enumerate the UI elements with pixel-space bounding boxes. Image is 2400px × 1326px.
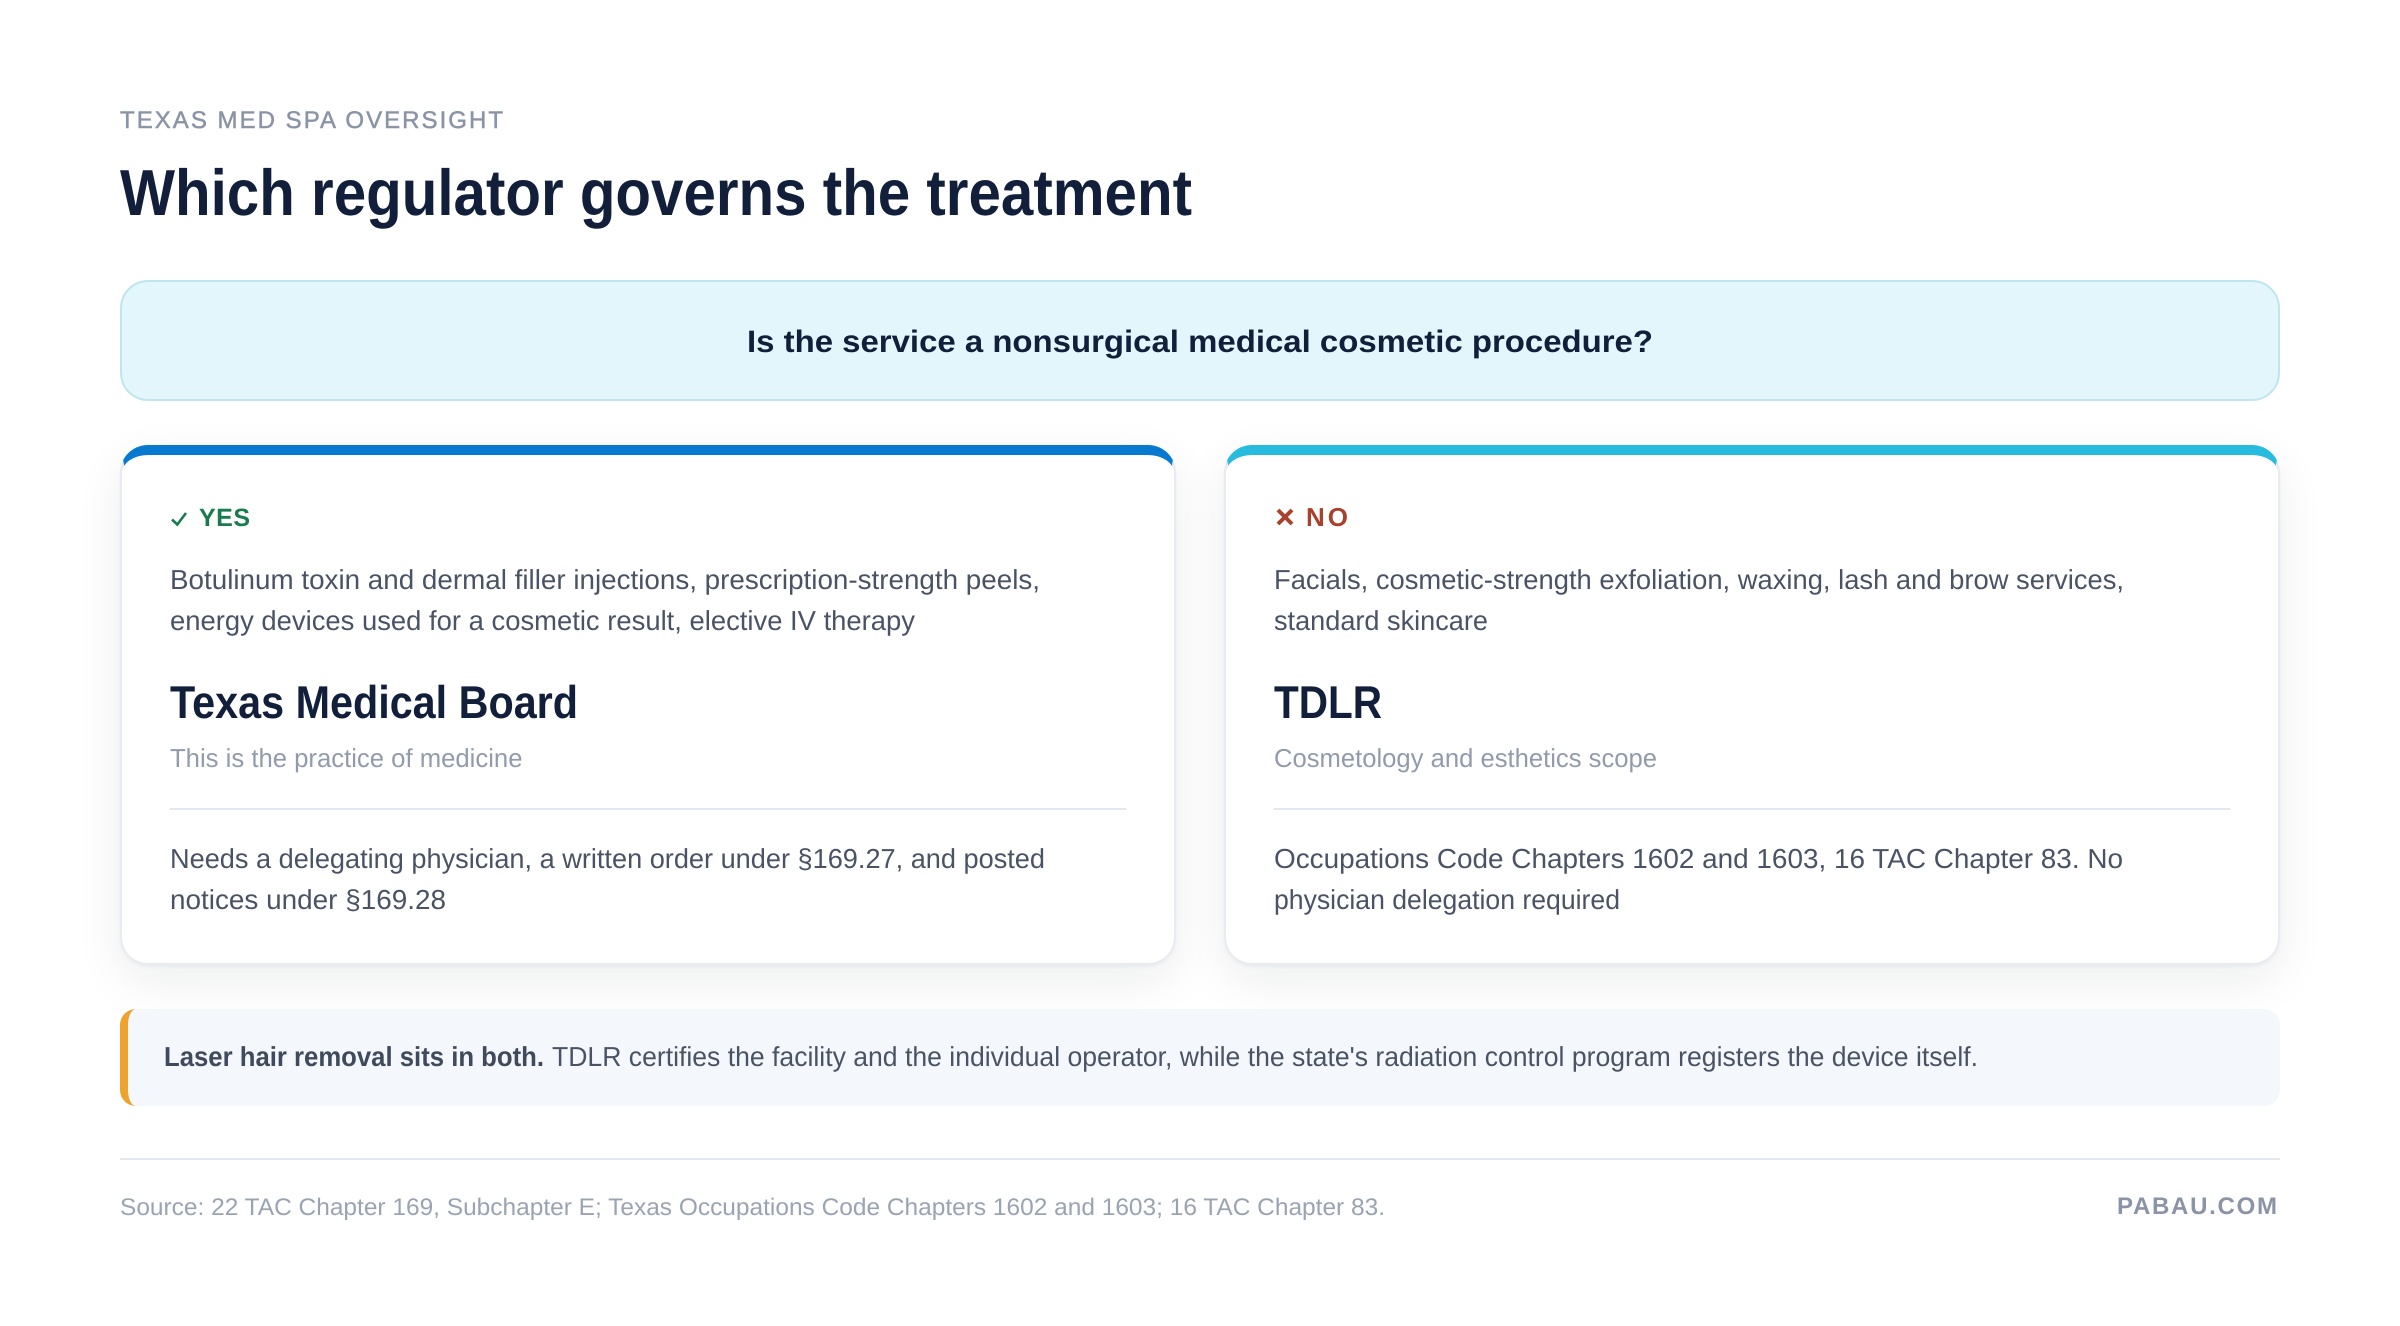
- yes services text: [170, 564, 1040, 636]
- panel: no card: [1224, 445, 2280, 965]
- yes requirements text: [170, 843, 1045, 915]
- no requirements text: [1274, 843, 2123, 915]
- eyebrow: TEXAS MED SPA OVERSIGHT: [120, 107, 503, 134]
- yes requirements text: notices under §169.28: [170, 884, 446, 915]
- no requirements text: physician delegation required: [1274, 884, 1620, 915]
- yes label: YES: [199, 504, 250, 532]
- panel: question banner: [120, 280, 2280, 401]
- source note: Source: 22 TAC Chapter 169, Subchapter E; Texas Occupations Code Chapters 1602 and 1603; 16 TAC Chapter 83.: [120, 1194, 1385, 1221]
- regulator heading: TDLR: TDLR: [1274, 676, 1382, 728]
- no services text: [1274, 564, 2124, 636]
- no label: NO: [1306, 502, 1348, 532]
- icon: check mark: [172, 513, 186, 524]
- yes services text: Botulinum toxin and dermal filler injections, prescription-strength peels,: [170, 564, 1040, 595]
- regulator heading: Texas Medical Board: Texas Medical Board: [170, 676, 578, 728]
- no services text: standard skincare: [1274, 605, 1488, 636]
- question text: Is the service a nonsurgical medical cosmetic procedure?: [747, 324, 1653, 359]
- regulator subheading: Cosmetology and esthetics scope: [1274, 743, 1657, 773]
- yes requirements text: Needs a delegating physician, a written order under §169.27, and posted: [170, 843, 1045, 874]
- callout bold lead: Laser hair removal sits in both.: [164, 1041, 544, 1072]
- callout: laser hair removal: [120, 1009, 2280, 1106]
- no requirements text: Occupations Code Chapters 1602 and 1603, 16 TAC Chapter 83. No: [1274, 843, 2123, 874]
- panel: yes card: [120, 445, 1176, 965]
- brand: pabau.com: PABAU.COM: [2117, 1193, 2277, 1220]
- callout text: TDLR certifies the facility and the individual operator, while the state's radiation control program registers the device itself.: [552, 1041, 1978, 1072]
- yes services text: energy devices used for a cosmetic result, elective IV therapy: [170, 605, 915, 636]
- no services text: Facials, cosmetic-strength exfoliation, waxing, lash and brow services,: [1274, 564, 2124, 595]
- title: Which regulator governs the treatment: [120, 156, 1192, 229]
- icon: cross mark: [1278, 510, 1292, 524]
- regulator subheading: This is the practice of medicine: [170, 743, 522, 773]
